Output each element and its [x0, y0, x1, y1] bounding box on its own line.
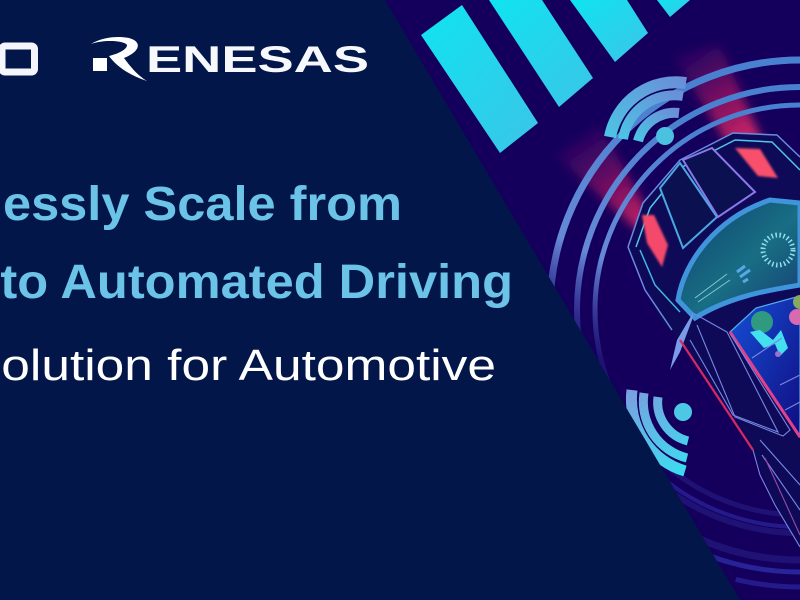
- passenger: left: [750, 311, 788, 357]
- logo swoosh R: [91, 37, 147, 81]
- crossing stripes: [421, 0, 690, 153]
- logo wordmark: ENESAS: [146, 39, 369, 80]
- partner logo: cropped box mark: [2, 46, 34, 72]
- sensor rings: [548, 56, 800, 590]
- window pink trim: [730, 332, 800, 437]
- rear window panes: [660, 163, 717, 248]
- lower body lines: [690, 313, 800, 547]
- cabin interior: [730, 296, 800, 437]
- red sill line: [680, 340, 753, 450]
- wifi icon: top: [610, 82, 686, 145]
- body shell: [628, 133, 800, 547]
- red light beams: [558, 44, 768, 234]
- dashboard bars: [695, 266, 750, 302]
- rear outline: [628, 133, 800, 330]
- wifi icon: bottom: [631, 390, 692, 471]
- background: indigo diagonal panel: [385, 0, 800, 600]
- tail light: right: [735, 148, 778, 178]
- artwork: car scene: [421, 0, 800, 587]
- logo dot: [93, 58, 107, 71]
- tail light: left: [642, 215, 668, 267]
- roof glass: [678, 200, 800, 318]
- dashed sensor dial: [763, 235, 793, 265]
- car body: [628, 133, 800, 547]
- passenger: right: [789, 295, 800, 325]
- side mirror: [670, 313, 693, 370]
- logo: Renesas: [91, 37, 369, 81]
